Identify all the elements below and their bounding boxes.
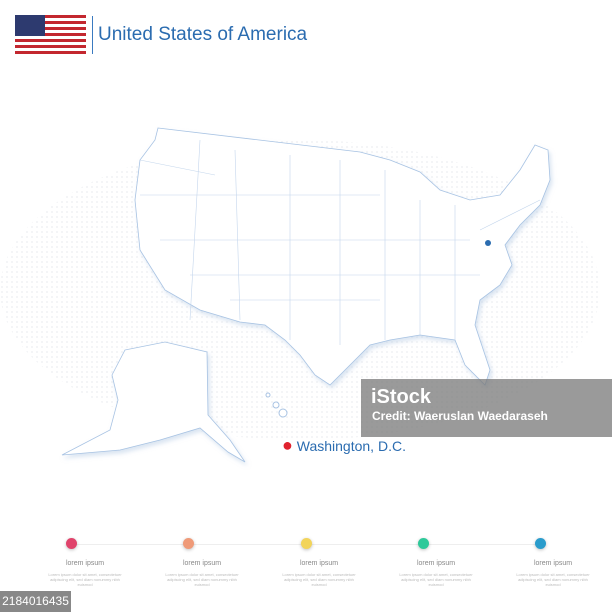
timeline: Lorem ipsum dolor sit amet, consectetuer adipiscing elit, sed diam nonummy nibh euismod [399,572,473,587]
title [92,16,307,54]
Hawaii [266,393,287,417]
step 3 [282,538,356,587]
map [1,128,598,465]
capital label: ● Washington, D.C. [282,435,406,455]
state lines [140,140,540,345]
flag icon [15,15,86,54]
dotted world background [0,140,600,440]
timeline: lorem ipsum [534,560,572,567]
watermark: iStock [371,386,431,408]
timeline: Lorem ipsum dolor sit amet, consectetuer adipiscing elit, sed diam nonummy nibh euismod [516,572,590,587]
id badge: 2184016435 [2,594,69,608]
title: United States of America [98,24,307,45]
DC marker [485,240,491,246]
timeline [48,538,590,587]
timeline: lorem ipsum [417,560,455,567]
step 5 [516,538,590,587]
mainland outline [135,128,550,385]
timeline: Lorem ipsum dolor sit amet, consectetuer adipiscing elit, sed diam nonummy nibh euismod [48,572,122,587]
timeline: Lorem ipsum dolor sit amet, consectetuer adipiscing elit, sed diam nonummy nibh euismod [165,572,239,587]
timeline: lorem ipsum [300,560,338,567]
watermark: Credit: Waeruslan Waedaraseh [372,409,548,423]
step 1 [48,538,122,587]
id badge [0,591,71,612]
watermark [361,379,612,437]
timeline: Lorem ipsum dolor sit amet, consectetuer adipiscing elit, sed diam nonummy nibh euismod [282,572,356,587]
timeline: lorem ipsum [183,560,221,567]
step 2 [165,538,239,587]
timeline: lorem ipsum [66,560,104,567]
step 4 [399,538,473,587]
Alaska [62,342,245,462]
